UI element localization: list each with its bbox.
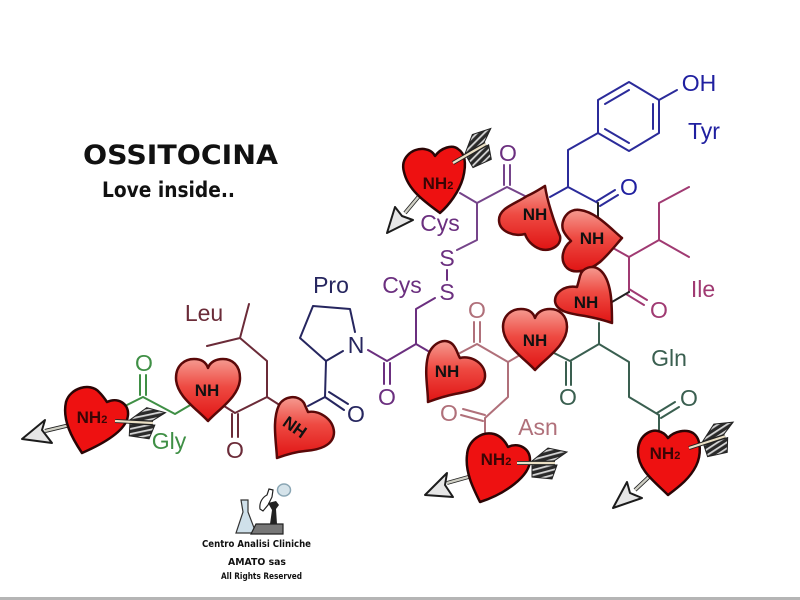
cysteine labels: S bbox=[439, 279, 455, 305]
proline labels: N bbox=[348, 332, 364, 358]
arrow heart: glycine NH2: NH2 bbox=[77, 408, 107, 427]
cysteine labels: Cys bbox=[382, 272, 422, 298]
heart: NH tyrosine-isoleucine bbox=[562, 210, 622, 271]
proline labels: O bbox=[347, 401, 365, 427]
logo text: AMATO sas bbox=[228, 557, 286, 568]
title: OSSITOCINA bbox=[83, 140, 278, 171]
leucine labels bbox=[185, 300, 244, 463]
cysteine labels: O bbox=[378, 384, 396, 410]
arrow heart: glutamine NH2: NH2 bbox=[650, 444, 680, 463]
logo: laboratory icon bbox=[236, 484, 290, 534]
isoleucine labels: Ile bbox=[691, 276, 715, 302]
heart: NH cysteine-tyrosine: NH bbox=[523, 205, 547, 224]
heart: NH leucine-proline: NH bbox=[279, 413, 310, 442]
glycine labels bbox=[135, 350, 187, 454]
leucine bonds bbox=[207, 304, 278, 437]
cysteine labels: S bbox=[439, 245, 455, 271]
cysteine labels bbox=[378, 140, 517, 410]
logo text: All Rights Reserved bbox=[221, 572, 302, 582]
lower cysteine bonds bbox=[368, 270, 447, 384]
isoleucine labels: O bbox=[650, 297, 668, 323]
heart: NH isoleucine-glutamine bbox=[555, 267, 612, 323]
tyrosine labels: Tyr bbox=[688, 118, 720, 144]
icon: thought bubble bbox=[278, 484, 290, 496]
arrow heart: asparagine NH2 bbox=[425, 433, 567, 502]
icon: flask bbox=[236, 500, 256, 533]
glutamine labels: Gln bbox=[651, 345, 687, 371]
heart: NH lower cysteine: NH bbox=[435, 362, 459, 381]
tyrosine bonds bbox=[550, 82, 677, 206]
arrow heart: glycine NH2 bbox=[22, 387, 166, 453]
logo text: Centro Analisi Cliniche bbox=[202, 539, 311, 550]
leucine labels: O bbox=[226, 437, 244, 463]
dark peptide connectors bbox=[598, 203, 629, 302]
arrow heart: asparagine NH2: NH2 bbox=[481, 450, 511, 469]
glycine labels: O bbox=[135, 350, 153, 376]
icon: scientist at microscope bbox=[260, 489, 279, 524]
upper cysteine bonds bbox=[457, 165, 527, 250]
isoleucine bonds bbox=[613, 187, 689, 305]
tyrosine labels bbox=[620, 70, 720, 200]
cysteine labels: Cys bbox=[420, 210, 460, 236]
glycine labels: Gly bbox=[152, 428, 187, 454]
heart: NH asparagine-glutamine bbox=[503, 309, 567, 370]
heart: NH glycine-leucine: NH bbox=[195, 381, 219, 400]
proline labels bbox=[313, 272, 365, 427]
proline labels: Pro bbox=[313, 272, 349, 298]
glutamine bonds bbox=[552, 323, 679, 430]
heart: NH asparagine-glutamine: NH bbox=[523, 331, 547, 350]
amino acid and atom labels bbox=[135, 70, 720, 463]
arrow heart: glutamine NH2 bbox=[613, 418, 741, 508]
heart: NH leucine-proline bbox=[275, 397, 334, 458]
molecule: residue bonds bbox=[127, 82, 689, 437]
heart: NH glycine-leucine bbox=[176, 359, 240, 421]
arrow heart: cysteine NH2: NH2 bbox=[423, 174, 453, 193]
subtitle: Love inside.. bbox=[102, 178, 235, 202]
proline bonds bbox=[300, 306, 355, 410]
cysteine labels: O bbox=[499, 140, 517, 166]
glutamine labels bbox=[559, 345, 698, 411]
asparagine bonds bbox=[460, 322, 520, 432]
asparagine labels: O bbox=[440, 400, 458, 426]
heart: NH isoleucine-glutamine: NH bbox=[574, 293, 598, 312]
logo text bbox=[202, 539, 311, 582]
heart: NH cysteine-tyrosine bbox=[499, 186, 560, 250]
glutamine labels: O bbox=[559, 384, 577, 410]
tyrosine labels: OH bbox=[682, 70, 716, 96]
heart: NH lower cysteine bbox=[426, 341, 485, 402]
isoleucine labels bbox=[650, 276, 715, 323]
asparagine labels: O bbox=[468, 297, 486, 323]
icon: bench bbox=[251, 524, 283, 534]
heart: NH tyrosine-isoleucine: NH bbox=[580, 229, 604, 248]
arrow heart: cysteine NH2 bbox=[387, 125, 504, 233]
asparagine labels bbox=[440, 297, 558, 440]
glutamine labels: O bbox=[680, 385, 698, 411]
tyrosine labels: O bbox=[620, 174, 638, 200]
leucine labels: Leu bbox=[185, 300, 223, 326]
asparagine labels: Asn bbox=[518, 414, 558, 440]
glycine bonds bbox=[127, 375, 192, 414]
